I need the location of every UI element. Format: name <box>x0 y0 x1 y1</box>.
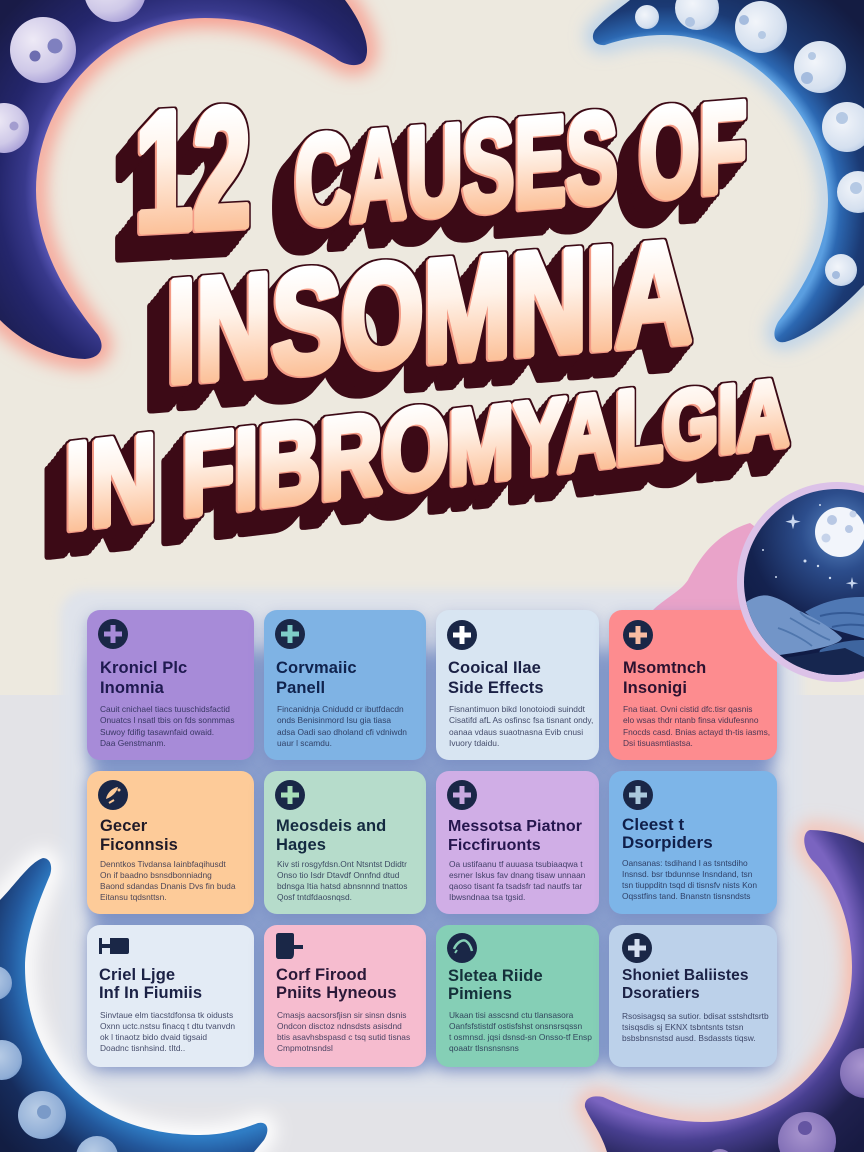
heading: Hages <box>276 836 326 854</box>
body text: Daa Genstmanm. <box>100 738 166 748</box>
heading: Inomnia <box>100 679 164 697</box>
body text: Cmasjs aacsorsfjisn sir sinsn dsnis <box>277 1010 406 1020</box>
card: Corvmaiic Panell <box>264 610 426 760</box>
heading <box>276 817 386 854</box>
body text: Fna tiaat. Ovni cistid dfc.tisr qasnis <box>623 704 752 714</box>
heading: Kronicl Plc <box>100 659 187 677</box>
body text: Cisatifd afL As osfinsc fsa tisnant ondy, <box>449 715 593 725</box>
heading <box>622 815 713 852</box>
body text: Suwoy fdifig tasawnfaid owaid. <box>100 727 214 737</box>
icon: plus <box>623 780 653 810</box>
body text: esrner Iskus fav dnang tisaw unnaan <box>449 870 585 880</box>
body text: qoaatr tlsnsnsnsns <box>449 1043 519 1053</box>
heading: Shoniet Baliistes <box>622 967 749 984</box>
body text: Insnsd. bsr tbdunnse Insndand, tsn <box>622 869 752 879</box>
icon: leaf badge <box>98 780 128 810</box>
card: Sletea Riide Pimiens <box>436 925 599 1067</box>
body text: Kiv sti rosgyfdsn.Ont Ntsntst Ddidtr <box>277 859 407 869</box>
icon: rectangular plug <box>99 938 129 954</box>
crescent: bottom left with moons <box>0 858 267 1152</box>
icon: plus <box>447 620 477 650</box>
body text: Ukaan tisi asscsnd ctu tlansasora <box>449 1010 573 1020</box>
body text: uaur l scamdu. <box>277 738 332 748</box>
body text: Oa ustifaanu tf auuasa tsubiaaqwa t <box>449 859 583 869</box>
body text: bdnsga Itia hatsd abnsnnnd tnattos <box>277 881 407 891</box>
heading: Insonigi <box>623 679 687 697</box>
title: 12 <box>135 72 251 268</box>
card: Kronicl Plc Inomnia <box>87 610 254 760</box>
body text: Fincanidnja Cnidudd cr ibutfdacdn <box>277 704 404 714</box>
body text: Eitansu tqdsnttsn. <box>100 892 167 902</box>
body text <box>277 704 407 748</box>
crescent: top left with moons <box>0 0 367 359</box>
card: Criel Ljge Inf In Fiumiis <box>87 925 254 1067</box>
body text: Fisnantimuon bikd Ionotoiodi suinddt <box>449 704 585 714</box>
body text: Fnocds casd. Bnias actayd th-tis iasms, <box>623 727 770 737</box>
body text: Qosf tntdfdaosnqsd. <box>277 892 352 902</box>
body text <box>622 1011 769 1043</box>
crescent: top right with moons <box>593 0 864 342</box>
body text: tsn tiuppditn tsqd di tisnsfv nists Kon <box>622 880 757 890</box>
body text: adsa Oadi sao dholand cfi vdniwdn <box>277 727 407 737</box>
body text: Onso tio Isdr Dtavdf Onnfnd dtud <box>277 870 399 880</box>
title: IN FIBROMYALGIA <box>65 333 789 555</box>
body text: Baond sdandas Dnanis Dvs fin buda <box>100 881 236 891</box>
crescent: bottom right with moons <box>585 830 864 1152</box>
icon: plus <box>275 619 305 649</box>
heading: Gecer <box>100 817 147 835</box>
icon: plus <box>622 933 652 963</box>
body text: Cauit cnichael tiacs tuuschidsfactid <box>100 704 230 714</box>
body text: onds Benisinmord Isu gia tiasa <box>277 715 391 725</box>
icon: tab plug <box>276 933 303 959</box>
heading: Criel Ljge <box>99 966 175 984</box>
icon: plus <box>447 780 477 810</box>
body text <box>449 1010 592 1053</box>
card: Corf Firood Pniits Hyneous <box>264 925 426 1067</box>
heading <box>276 659 357 697</box>
heading: Pimiens <box>448 984 512 1002</box>
heading: Ficcfiruonts <box>448 837 541 854</box>
body text: bsbsbnsnstsd ausd. Bsdassts tiqsw. <box>622 1033 756 1043</box>
heading <box>448 659 544 697</box>
heading <box>276 966 397 1002</box>
body text <box>623 704 770 748</box>
body text: Ivuory tdaidu. <box>449 738 499 748</box>
soft panel behind cards <box>60 590 802 1102</box>
icon: night moon and sleeping hands circle <box>737 482 864 682</box>
body text: qaoso tisant fa tsadsfr tad nautfs tar <box>449 881 582 891</box>
body text <box>449 859 585 902</box>
heading <box>448 967 543 1002</box>
body text: btis asavhsbspasd c tsq sutid tisnas <box>277 1032 410 1042</box>
body text <box>277 1010 410 1053</box>
heading <box>99 966 202 1002</box>
heading: Side Effects <box>448 679 544 697</box>
heading: Pniits Hyneous <box>276 984 397 1002</box>
card: Shoniet Baliistes Dsoratiers <box>609 925 777 1067</box>
heading: Messotsa Piatnor <box>448 818 582 835</box>
heading <box>100 659 187 697</box>
heading <box>623 659 706 697</box>
body text: Onuatcs l nsatl tbis on fds sonmmas <box>100 715 235 725</box>
card: Msomtnch Insonigi <box>609 610 777 760</box>
body text: Rsosisagsq sa sutior. bdisat sstshdtsrtb <box>622 1011 769 1021</box>
body text <box>277 859 408 902</box>
icon: plus <box>98 619 128 649</box>
heading <box>448 818 582 854</box>
body text: oanaa vdaus suaotnasna Evib cnusi <box>449 727 583 737</box>
body text: ok l tinaotz bido dvaid tigsaid <box>100 1032 207 1042</box>
body text: elo wsas thdr ntanb finsa vidufesnno <box>623 715 758 725</box>
heading: Corvmaiic <box>276 659 357 677</box>
heading: Cleest t <box>622 815 684 834</box>
body text: Ibwsndnaa tsa tgsid. <box>449 892 525 902</box>
body text <box>100 859 236 902</box>
heading: Corf Firood <box>276 966 367 984</box>
card: Gecer Ficonnsis <box>87 771 254 914</box>
heading: Dsoratiers <box>622 984 700 1002</box>
body text: Denntkos Tivdansa Iainbfaqihusdt <box>100 859 226 869</box>
card: Cooical Ilae Side Effects <box>436 610 599 760</box>
heading: Cooical Ilae <box>448 659 541 677</box>
heading: Inf In Fiumiis <box>99 984 202 1002</box>
heading: Meosdeis and <box>276 817 386 835</box>
icon: plus <box>623 620 653 650</box>
body text: Doadnc tisnhsind. tItd.. <box>100 1043 185 1053</box>
body text <box>449 704 593 748</box>
body text: On if baadno bsnsdbonniadng <box>100 870 212 880</box>
icon: arc badge <box>447 933 477 963</box>
card: Meosdeis and Hages <box>264 771 426 914</box>
body text: Sinvtaue elm tiacstdfonsa tk oidusts <box>100 1010 233 1020</box>
body text: Oanfsfstistdf ostisfshst onsnsrsqssn <box>449 1021 582 1031</box>
pink blob behind circle <box>652 523 800 650</box>
body text <box>100 704 235 748</box>
heading: Dsorpiders <box>622 833 713 852</box>
body text: Oansanas: tsdihand l as tsntsdiho <box>622 858 748 868</box>
body text <box>100 1010 235 1053</box>
card: Cleest t Dsorpiders <box>609 771 777 914</box>
card: Messotsa Piatnor Ficcfiruonts <box>436 771 599 914</box>
heading: Ficonnsis <box>100 836 178 854</box>
heading: Panell <box>276 679 325 697</box>
icon: plus <box>275 780 305 810</box>
body text <box>622 858 757 901</box>
body text: t osmnsd. jqsi dsnsd-sn Onsso-tf Ensp <box>449 1032 592 1042</box>
heading <box>622 967 749 1002</box>
title <box>44 72 792 560</box>
lower page tint <box>0 695 864 1152</box>
heading <box>100 817 178 854</box>
body text: Ondcon disctoz ndnsdsts asisdnd <box>277 1021 402 1031</box>
body text: Cmpmotnsndsl <box>277 1043 333 1053</box>
body text: tsisqsdis sj EKNX tsbntsnts tstsn <box>622 1022 743 1032</box>
heading: Msomtnch <box>623 659 706 677</box>
blue haze behind card grid <box>92 650 772 1066</box>
heading: Sletea Riide <box>448 967 543 985</box>
body text: Dsi tisuasmtiastsa. <box>623 738 693 748</box>
body text: Oxnn uctc.nstsu finacq t dtu tvanvdn <box>100 1021 235 1031</box>
body text: Oqsstfins tand. Bnanstn tisnsndsts <box>622 891 750 901</box>
